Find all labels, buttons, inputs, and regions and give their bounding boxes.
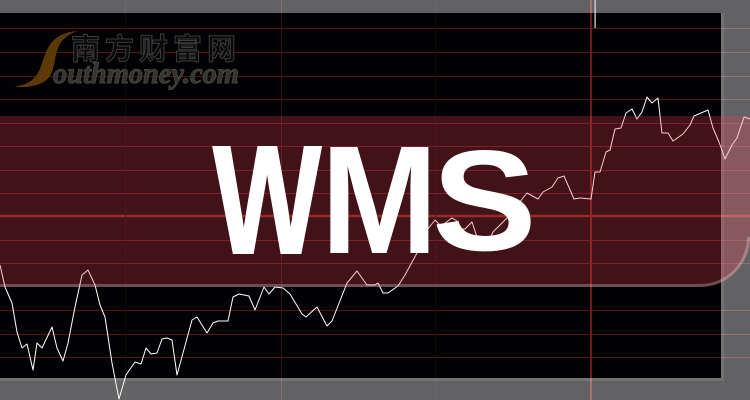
logo Chinese name: 南方财富网	[71, 26, 241, 68]
letter W: W	[213, 114, 322, 286]
white tick mark	[594, 0, 596, 28]
title WMS	[213, 114, 537, 286]
letter S: S	[432, 120, 537, 280]
logo: Southmoney	[15, 26, 241, 90]
banner panel edge	[0, 237, 748, 286]
line chart	[0, 97, 750, 399]
banner panel	[0, 116, 750, 287]
logo Latin name: outhmoney.com	[53, 57, 239, 90]
logo swoosh S	[15, 31, 78, 87]
letter M: M	[321, 115, 438, 286]
